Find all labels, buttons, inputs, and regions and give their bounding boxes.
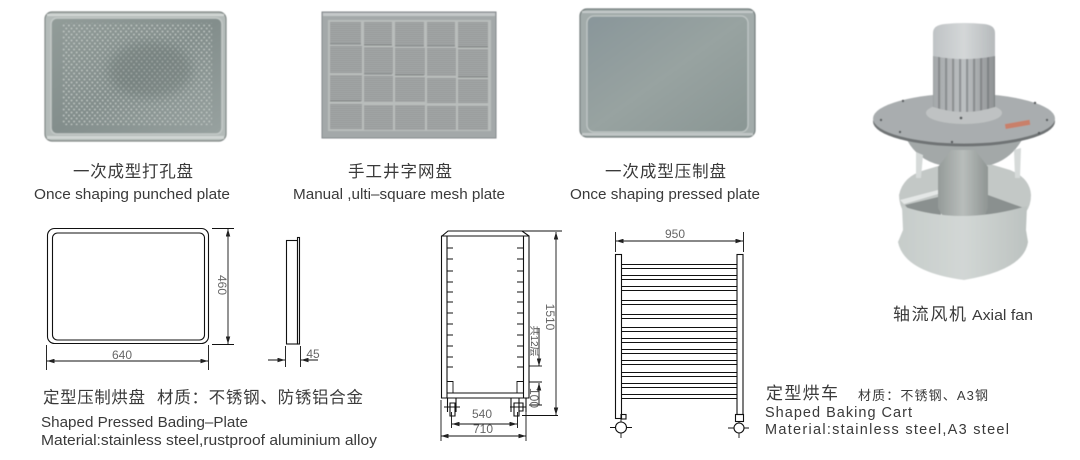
dimension: 540: [452, 407, 518, 428]
fan: front duct body: [898, 206, 1028, 280]
dimension: width 950: 950: [665, 227, 685, 241]
dimension: height 1510: [522, 231, 562, 416]
dimension: 710: 710: [473, 422, 493, 436]
dimension: width 640: 640: [112, 348, 132, 362]
drawing: baking plate top view: [46, 228, 234, 370]
text: baking plate description: 定型压制烘盘: [43, 388, 145, 407]
fan: motor finned body: [933, 56, 995, 112]
dimension: 710: [441, 400, 526, 441]
text: baking plate description: 材质：不锈钢、防锈铝合金: [157, 388, 364, 407]
caption: axial fan: [893, 305, 1033, 324]
text: baking cart description: Shaped Baking Cart: [765, 405, 912, 421]
fan: motor dome: [933, 23, 995, 59]
caption: pressed plate: 一次成型压制盘: [605, 162, 726, 181]
dimension: height 1510: 1510: [543, 304, 557, 331]
drawing: baking plate side view: [268, 238, 320, 367]
caption: mesh plate: 手工井字网盘: [348, 162, 452, 181]
cart right wheel: [510, 398, 526, 416]
photo: pressed plate tray: [580, 9, 755, 137]
fan: central shaft: [938, 150, 988, 220]
photo: punched plate tray: [45, 12, 226, 141]
fan: bolt holes: [880, 100, 1048, 143]
caption: axial fan: Axial fan: [972, 308, 1033, 324]
dimension: 100: 100: [527, 388, 541, 408]
caption: mesh plate: [293, 162, 505, 203]
caption: punched plate: 一次成型打孔盘: [73, 162, 193, 181]
photo: axial fan: [873, 23, 1055, 280]
caption: mesh plate: Manual ,ulti–square mesh plate: [293, 187, 505, 203]
dimension: width 950: [616, 227, 744, 252]
caster left: [610, 419, 632, 438]
photo: multi-square mesh tray: [322, 12, 496, 138]
dimension: 12 layers: 共12层: [528, 325, 540, 357]
dimension: 540: 540: [472, 407, 492, 421]
fan: lower duct rear: [899, 164, 1031, 215]
fan: blade shadows: [905, 195, 1024, 220]
caster right: [728, 422, 749, 438]
text: baking plate description: Shaped Pressed Bading–Plate: [41, 415, 248, 431]
text: baking plate description: Material:stainless steel,rustproof aluminium alloy: [41, 433, 378, 449]
fan: left blade highlight: [900, 190, 938, 204]
fan: motor collar: [926, 102, 1002, 124]
fan: disc top: [873, 94, 1055, 144]
fan: support struts: [916, 148, 1021, 178]
text: baking cart description: 材质：不锈钢、A3钢: [858, 388, 988, 403]
dimension: 12 layers: [528, 325, 542, 366]
dimension: height 460: [215, 229, 229, 344]
text: baking cart description: 定型烘车: [766, 384, 838, 403]
caption: punched plate: Once shaping punched plate: [34, 187, 230, 203]
cart left wheel: [444, 398, 460, 416]
dimension: depth 45: 45: [306, 347, 320, 361]
caption: pressed plate: Once shaping pressed plate: [570, 187, 760, 203]
text: baking cart description: [765, 384, 1009, 438]
drawing: baking cart front view: [441, 231, 562, 441]
dimension: height 460: 460: [215, 275, 229, 295]
fan: bowl below disc: [907, 140, 1022, 165]
caption: punched plate: [34, 162, 230, 203]
drawing: baking cart side view: [610, 227, 749, 438]
fan: disc edge: [873, 96, 1055, 146]
text: baking plate description: [41, 388, 378, 449]
fan: red label: [1005, 120, 1030, 129]
caption: axial fan: 轴流风机: [893, 305, 966, 324]
text: baking cart description: Material:stainless steel,A3 steel: [765, 422, 1009, 438]
caption: pressed plate: [570, 162, 760, 203]
